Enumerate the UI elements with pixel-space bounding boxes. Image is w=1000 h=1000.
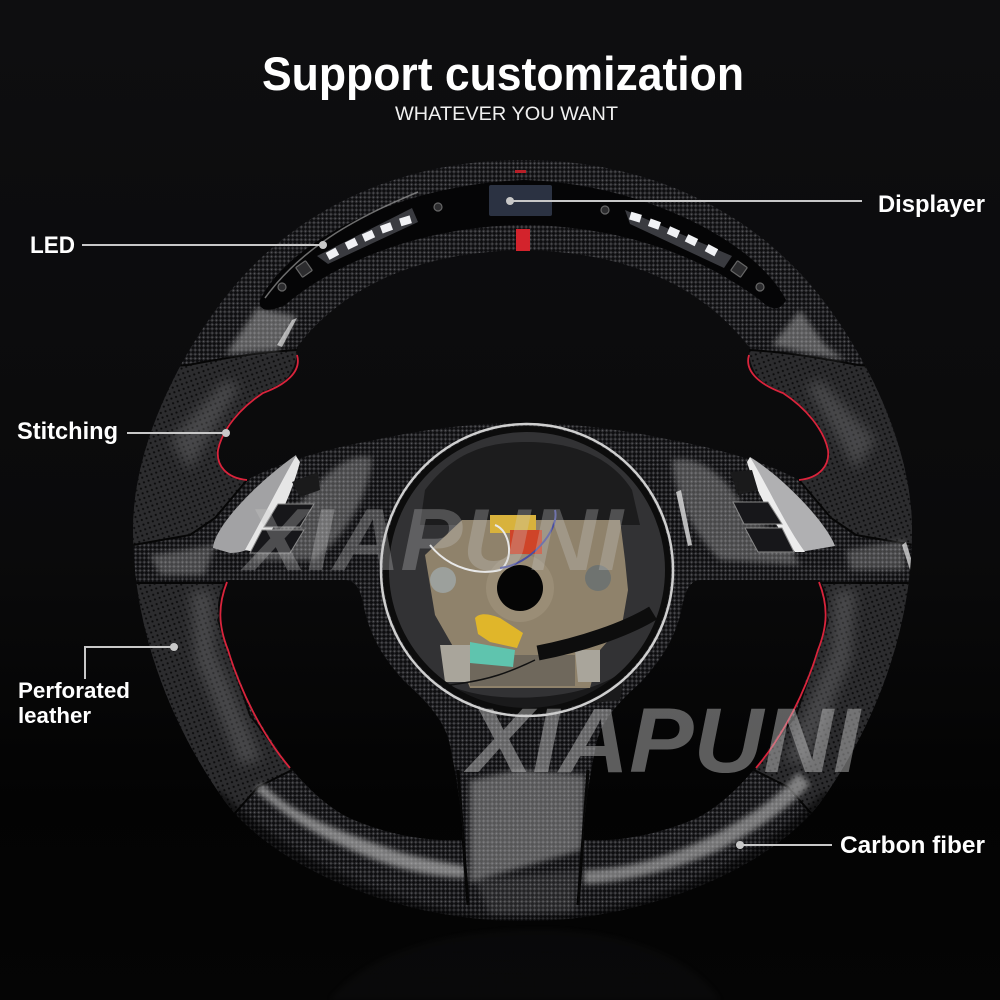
yellow and red tag — [490, 515, 536, 533]
hub bezel — [386, 429, 668, 711]
red centre mark — [516, 229, 530, 251]
title: Support customization — [262, 47, 744, 100]
hub upper cavity — [420, 442, 640, 525]
spoke edges — [458, 770, 588, 905]
callout: LED — [30, 232, 327, 259]
callout: Carbon fiber — [736, 832, 985, 859]
white gloss streaks — [277, 318, 914, 570]
right LEDs — [625, 210, 732, 268]
screen — [489, 185, 552, 216]
top red mark — [515, 170, 526, 173]
leather: upper left — [133, 349, 297, 546]
left LEDs — [317, 208, 418, 264]
white wires — [430, 525, 509, 572]
red stitching — [218, 355, 828, 768]
callout: Perforated leather: leather — [18, 703, 91, 728]
callout: Stitching — [17, 418, 230, 445]
leather: upper right — [749, 349, 912, 546]
teal connector — [470, 642, 515, 667]
steering wheel — [133, 160, 912, 921]
carbon rim and spokes — [133, 160, 912, 921]
subtitle: WHATEVER YOU WANT — [395, 104, 618, 125]
metal plate — [425, 520, 628, 688]
hub lower dark trim — [440, 670, 625, 712]
watermark upper: XIAPUNI — [240, 490, 625, 589]
leather sheen — [170, 380, 876, 765]
yellow connector — [475, 614, 523, 648]
left paddle and buttons — [213, 455, 320, 553]
callout: Displayer: Displayer — [878, 191, 985, 218]
leather: lower right — [754, 582, 908, 814]
carbon gloss patches — [150, 308, 905, 915]
leather: lower left — [136, 582, 293, 813]
callout: Stitching: Stitching — [17, 418, 118, 445]
right paddle and buttons — [730, 457, 835, 552]
callout: LED: LED — [30, 232, 75, 259]
thin wire — [450, 660, 535, 685]
buttons — [278, 203, 764, 291]
wire loom — [538, 613, 653, 653]
centre hole — [486, 554, 554, 622]
callout: Displayer — [506, 191, 985, 218]
callout: Perforated leather — [18, 643, 178, 728]
LED display band — [260, 170, 786, 310]
central hub — [381, 424, 673, 716]
wheel reflection — [330, 930, 720, 1000]
callout: Carbon fiber: Carbon fiber — [840, 832, 985, 859]
springs — [430, 567, 456, 593]
callout: Perforated leather: Perforated — [18, 678, 130, 703]
watermark lower: XIAPUNI — [463, 690, 863, 792]
rim edge shadow — [523, 795, 830, 925]
